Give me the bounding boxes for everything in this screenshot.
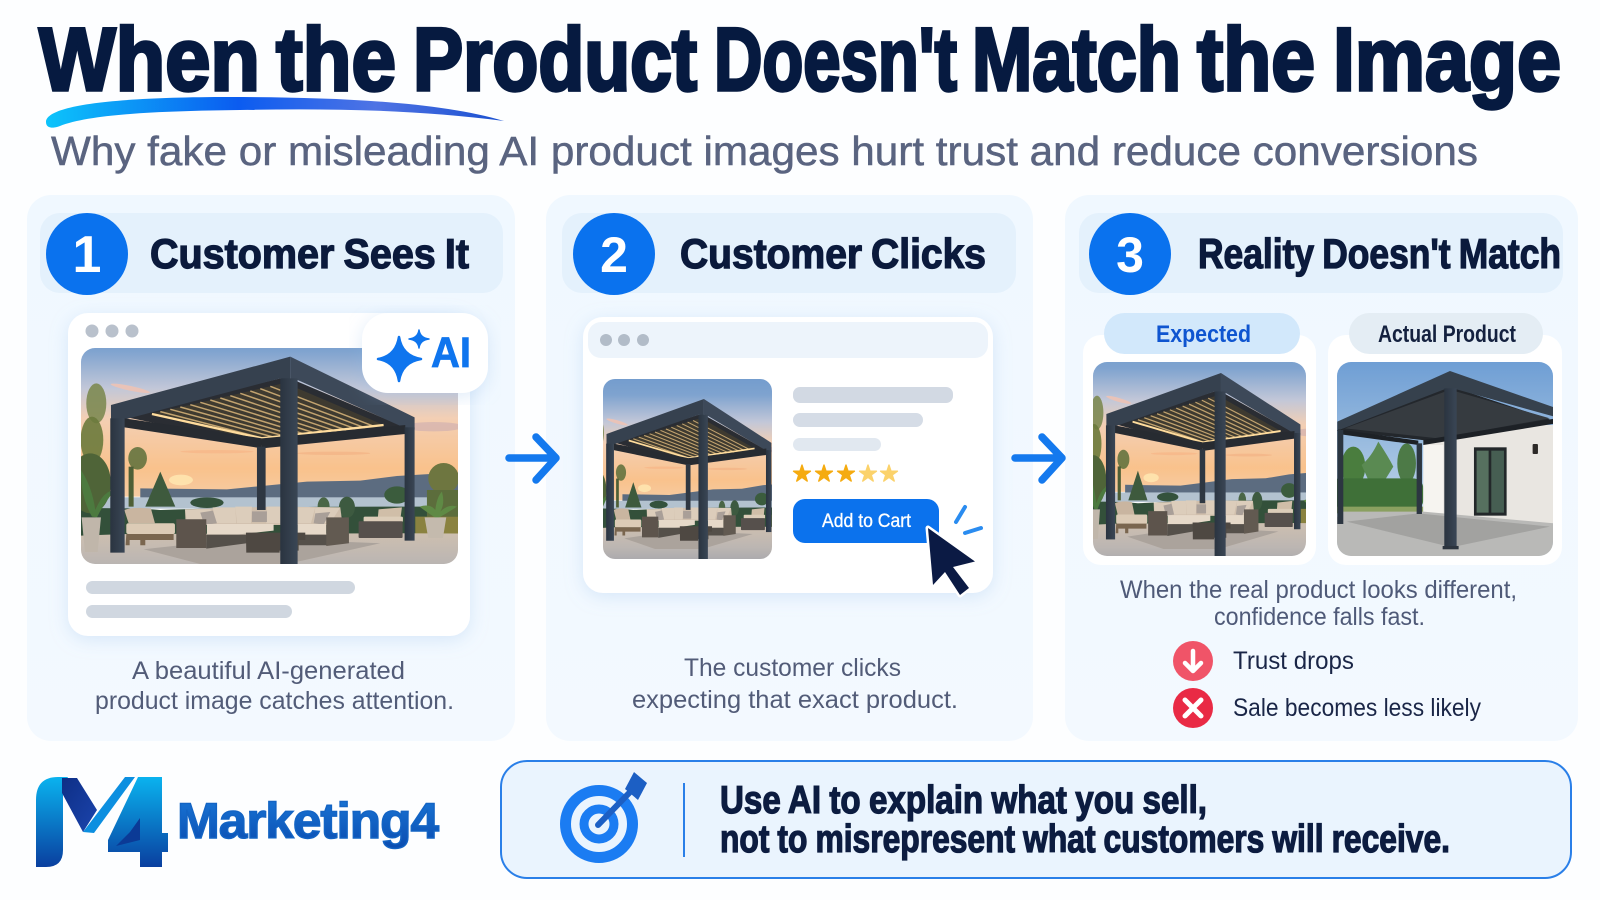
panel 2 caption: expecting that exact product. bbox=[632, 686, 958, 714]
step 1 badge: 1 bbox=[73, 226, 101, 284]
star rating bbox=[792, 462, 899, 487]
star rating: ★ bbox=[858, 462, 878, 487]
actual product label bbox=[1349, 313, 1543, 354]
title: the bbox=[1197, 9, 1315, 109]
browser top bar bbox=[588, 322, 988, 358]
step 3 badge: 3 bbox=[1116, 227, 1144, 283]
trust drops item: Trust drops bbox=[1233, 647, 1354, 675]
panel 3 explanation: confidence falls fast. bbox=[1214, 603, 1425, 631]
expected comparison card bbox=[1083, 313, 1316, 565]
panel 1 caption: product image catches attention. bbox=[95, 687, 454, 715]
panel 1 header bar bbox=[40, 213, 503, 293]
title underline swoosh bbox=[46, 97, 504, 128]
panel: customer clicks bbox=[525, 195, 1033, 741]
logo mark bbox=[36, 777, 168, 867]
window dots bbox=[600, 334, 649, 346]
title: When bbox=[39, 9, 260, 109]
star rating: ★ bbox=[814, 462, 834, 487]
panel 3 explanation: When the real product looks different, bbox=[1120, 576, 1517, 604]
panel 2 header bar bbox=[562, 213, 1016, 293]
sale less likely item: Sale becomes less likely bbox=[1233, 694, 1481, 722]
window dots bbox=[86, 324, 138, 338]
expected label bbox=[1104, 313, 1300, 354]
cursor with click ticks bbox=[928, 507, 981, 595]
expected label: Expected bbox=[1156, 321, 1251, 348]
panel: reality doesn't match bbox=[1010, 195, 1578, 741]
takeaway text bbox=[720, 779, 1450, 861]
step 2 badge bbox=[573, 213, 655, 295]
Marketing4 logo bbox=[36, 777, 439, 867]
expected pergola image bbox=[1093, 362, 1306, 556]
title bbox=[39, 9, 1561, 109]
step 1 badge bbox=[46, 213, 128, 295]
title: Image bbox=[1333, 9, 1561, 109]
actual pergola photo bbox=[1337, 362, 1553, 556]
panel 3 explanation bbox=[1120, 576, 1517, 631]
placeholder text lines bbox=[86, 581, 355, 618]
trust drops item bbox=[1173, 641, 1354, 681]
AI pergola image bbox=[81, 348, 458, 564]
title: Match bbox=[972, 9, 1181, 109]
title: Doesn't bbox=[714, 9, 957, 109]
logo wordmark: Marketing4 bbox=[177, 793, 439, 849]
AI badge bbox=[362, 313, 488, 393]
panel: customer sees it bbox=[27, 195, 515, 741]
placeholder text lines bbox=[793, 387, 953, 451]
panel 1 caption bbox=[95, 657, 454, 715]
panel 2 caption: The customer clicks bbox=[684, 654, 901, 682]
arrow: step 2 to step 3 bbox=[1015, 437, 1062, 480]
panel 3 header bar bbox=[1079, 213, 1563, 293]
actual comparison card bbox=[1328, 313, 1563, 565]
subtitle: Why fake or misleading AI product images hurt trust and reduce conversions bbox=[51, 128, 1478, 174]
panel 2 caption bbox=[632, 654, 958, 714]
star rating: ★ bbox=[836, 462, 856, 487]
browser card with AI image bbox=[64, 308, 492, 644]
icon: target with arrow bbox=[566, 772, 647, 858]
sale less likely item bbox=[1173, 688, 1481, 728]
actual product label: Actual Product bbox=[1378, 321, 1516, 348]
step 3 badge bbox=[1089, 213, 1171, 295]
star rating: ★ bbox=[792, 462, 812, 487]
step 2 badge: 2 bbox=[600, 227, 628, 283]
add to cart button bbox=[793, 499, 939, 543]
star rating: ★ bbox=[879, 462, 899, 487]
title: the bbox=[276, 9, 396, 109]
divider bbox=[683, 783, 685, 857]
add to cart button: Add to Cart bbox=[822, 511, 912, 532]
product thumbnail bbox=[603, 379, 772, 559]
takeaway text: Use AI to explain what you sell, bbox=[720, 779, 1207, 822]
panel 1 caption: A beautiful AI-generated bbox=[132, 657, 405, 685]
product page card bbox=[525, 317, 993, 595]
panel 1 heading: Customer Sees It bbox=[150, 230, 469, 277]
callout: takeaway bbox=[501, 761, 1571, 878]
panel 2 heading: Customer Clicks bbox=[680, 230, 986, 277]
takeaway text: not to misrepresent what customers will receive. bbox=[720, 818, 1450, 861]
AI badge: AI bbox=[431, 329, 471, 377]
title: Product bbox=[413, 9, 697, 109]
arrow: step 1 to step 2 bbox=[509, 437, 556, 480]
